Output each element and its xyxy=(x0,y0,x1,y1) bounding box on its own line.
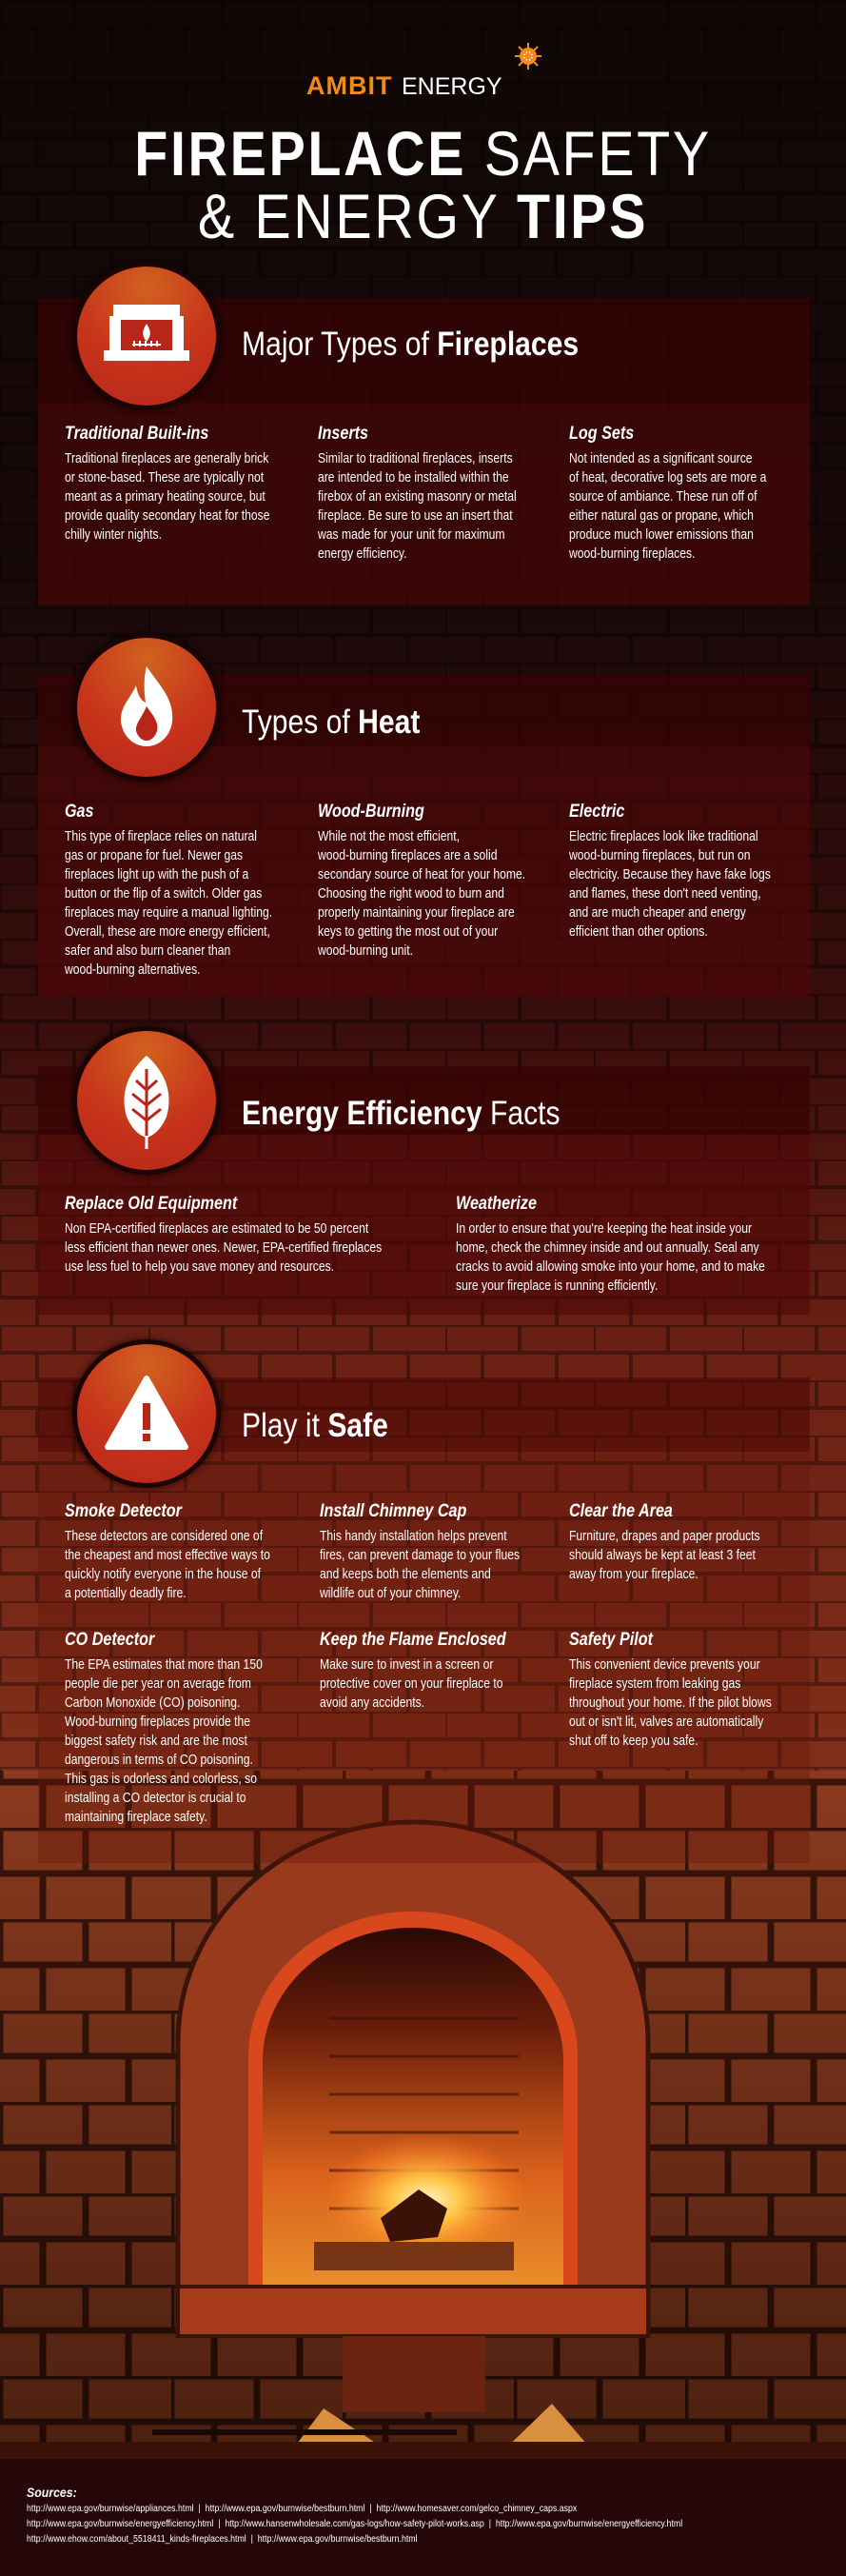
text: gas xyxy=(65,802,272,978)
text: co detector: Wood-burning fireplaces provide the xyxy=(65,1714,250,1730)
text: log sets: produce much lower emissions than xyxy=(569,527,754,543)
panel: major types of fireplaces xyxy=(38,298,810,604)
text: electric: electricity. Because they have fake logs xyxy=(569,867,771,882)
text: safety pilot: This convenient device prevents your xyxy=(569,1657,760,1673)
text: safety pilot: out or isn't lit, valves are automatically xyxy=(569,1714,763,1730)
text: clear the area: Furniture, drapes and paper products xyxy=(569,1529,760,1544)
text: safety pilot: fireplace system from leaking gas xyxy=(569,1676,740,1692)
text: wood-burning: properly maintaining your fireplace are xyxy=(318,905,515,921)
text: wood-burning: wood-burning fireplaces are a solid xyxy=(318,848,497,863)
text: log sets xyxy=(569,424,767,562)
text: replace old equipment: Non EPA-certified fireplaces are estimated to be 50 percent xyxy=(65,1221,368,1237)
text: gas: Gas xyxy=(65,802,94,822)
text: co detector: Carbon Monoxide (CO) poisoning. xyxy=(65,1695,240,1711)
text: chimney cap: wildlife out of your chimney. xyxy=(320,1586,461,1601)
panel: play it safe xyxy=(38,1377,810,1863)
text: weatherize: In order to ensure that you're keeping the heat inside your xyxy=(456,1221,752,1237)
text: co detector: This gas is odorless and colorless, so xyxy=(65,1772,257,1787)
text: log sets: wood-burning fireplaces. xyxy=(569,546,695,562)
text: traditional xyxy=(65,424,270,543)
text: wood-burning: wood-burning unit. xyxy=(318,943,413,959)
text: inserts: Similar to traditional fireplaces, inserts xyxy=(318,451,513,466)
text: electric xyxy=(569,802,771,940)
text: log sets: Not intended as a significant source xyxy=(569,451,753,466)
text: clear the area: should always be kept at least 3 feet xyxy=(569,1548,756,1563)
heading: Types of Heat xyxy=(242,703,420,741)
text: electric: Electric fireplaces look like traditional xyxy=(569,829,758,844)
logo: AMBIT xyxy=(306,71,392,100)
text: clear the area xyxy=(569,1501,760,1582)
text: inserts xyxy=(318,424,517,562)
heading: Major Types of Fireplaces xyxy=(242,326,579,363)
text: replace old equipment: Replace Old Equipment xyxy=(65,1194,237,1214)
text: traditional: provide quality secondary heat for those xyxy=(65,508,270,524)
icon: sun xyxy=(515,43,541,69)
text: gas: button or the flip of a switch. Older gas xyxy=(65,886,262,902)
icon: flame xyxy=(72,633,221,782)
sources: Sources: xyxy=(27,2485,77,2500)
text: weatherize: Weatherize xyxy=(456,1194,537,1214)
text: co detector: people die per year on average from xyxy=(65,1676,251,1692)
text: co detector xyxy=(65,1630,263,1825)
text: gas: wood-burning alternatives. xyxy=(65,962,201,978)
sources: http://www.epa.gov/burnwise/appliances.html | http://www.epa.gov/burnwise/bestburn.html | http://www.homesaver.com/gelco_chimney_caps.aspx xyxy=(27,2504,577,2514)
text: smoke detector: a potentially deadly fire. xyxy=(65,1586,187,1601)
text: safety pilot: shut off to keep you safe. xyxy=(569,1734,698,1749)
text: smoke detector: the cheapest and most effective ways to xyxy=(65,1548,270,1563)
sources: http://www.epa.gov/burnwise/energyefficiency.html | http://www.hansenwholesale.com/gas-logs/how-safety-pilot-works.asp | http://www.epa.gov/burnwise/energyefficiency.html xyxy=(27,2519,682,2529)
text: traditional: Traditional fireplaces are generally brick xyxy=(65,451,268,466)
text: log sets: Log Sets xyxy=(569,424,634,444)
text: inserts: are intended to be installed within the xyxy=(318,470,509,485)
icon: warning xyxy=(72,1339,221,1488)
text: chimney cap xyxy=(320,1501,520,1601)
text: wood-burning: Wood-Burning xyxy=(318,802,424,822)
text: co detector: CO Detector xyxy=(65,1630,154,1650)
text: smoke detector: Smoke Detector xyxy=(65,1501,182,1521)
logo xyxy=(306,43,541,100)
illustration: fireplace xyxy=(0,1771,846,2459)
text: traditional: meant as a primary heating source, but xyxy=(65,489,266,505)
text: replace old equipment: less efficient than newer ones. Newer, EPA-certified fireplaces xyxy=(65,1240,382,1256)
text: co detector: The EPA estimates that more than 150 xyxy=(65,1657,263,1673)
text: electric: and are much cheaper and energy xyxy=(569,905,746,921)
icon: leaf xyxy=(72,1026,221,1175)
sources xyxy=(0,2459,846,2576)
text: inserts: firebox of an existing masonry or metal xyxy=(318,489,517,505)
text: keep flame enclosed: protective cover on your fireplace to xyxy=(320,1676,503,1692)
text: keep flame enclosed xyxy=(320,1630,506,1711)
text: keep flame enclosed: Make sure to invest in a screen or xyxy=(320,1657,493,1673)
text: wood-burning xyxy=(318,802,525,959)
text: wood-burning: secondary source of heat for your home. xyxy=(318,867,525,882)
panel: types of heat xyxy=(38,675,810,998)
text: inserts: fireplace. Be sure to use an insert that xyxy=(318,508,513,524)
text: safety pilot xyxy=(569,1630,772,1749)
text: gas: fireplaces light up with the push of a xyxy=(65,867,248,882)
text: weatherize: home, check the chimney inside and out annually. Seal any xyxy=(456,1240,759,1256)
text: co detector: biggest safety risk and are the most xyxy=(65,1734,247,1749)
text: smoke detector: quickly notify everyone in the house of xyxy=(65,1567,261,1582)
heading: Energy Efficiency Facts xyxy=(242,1095,561,1132)
text: wood-burning: While not the most efficient, xyxy=(318,829,460,844)
text: inserts: Inserts xyxy=(318,424,368,444)
text: log sets: of heat, decorative log sets are more a xyxy=(569,470,766,485)
text: gas: Overall, these are more energy efficient, xyxy=(65,924,270,940)
text: clear the area: Clear the Area xyxy=(569,1501,673,1521)
text: co detector: maintaining fireplace safety. xyxy=(65,1810,207,1825)
text: log sets: either natural gas or propane, which xyxy=(569,508,754,524)
text: chimney cap: This handy installation helps prevent xyxy=(320,1529,507,1544)
text: chimney cap: fires, can prevent damage to your flues xyxy=(320,1548,520,1563)
text: chimney cap: and keeps both the elements and xyxy=(320,1567,491,1582)
text: wood-burning: Choosing the right wood to burn and xyxy=(318,886,504,902)
text: smoke detector: These detectors are considered one of xyxy=(65,1529,263,1544)
text: clear the area: away from your fireplace. xyxy=(569,1567,698,1582)
text: smoke detector xyxy=(65,1501,270,1601)
heading: Play it Safe xyxy=(242,1407,388,1444)
text: safety pilot: Safety Pilot xyxy=(569,1630,653,1650)
text: keep flame enclosed: avoid any accidents. xyxy=(320,1695,424,1711)
text: co detector: dangerous in terms of CO poisoning. xyxy=(65,1753,253,1768)
title xyxy=(134,118,712,251)
text: weatherize: sure your fireplace is running efficiently. xyxy=(456,1278,658,1294)
text: gas: gas or propane for fuel. Newer gas xyxy=(65,848,243,863)
text: co detector: installing a CO detector is crucial to xyxy=(65,1791,246,1806)
text: gas: safer and also burn cleaner than xyxy=(65,943,230,959)
logo: ENERGY xyxy=(402,73,502,100)
text: gas: This type of fireplace relies on natural xyxy=(65,829,257,844)
text: weatherize: cracks to avoid allowing smoke into your home, and to make xyxy=(456,1259,765,1275)
text: electric: and flames, these don't need venting, xyxy=(569,886,761,902)
text: log sets: source of ambiance. These run off of xyxy=(569,489,757,505)
text: inserts: was made for your unit for maximum xyxy=(318,527,505,543)
text: traditional: chilly winter nights. xyxy=(65,527,162,543)
text: electric: wood-burning fireplaces, but run on xyxy=(569,848,751,863)
text: electric: Electric xyxy=(569,802,624,822)
title: FIREPLACE SAFETY xyxy=(134,118,712,188)
icon: fireplace xyxy=(72,262,221,410)
text: replace old equipment: use less fuel to help you save money and resources. xyxy=(65,1259,334,1275)
text: wood-burning: keys to getting the most out of your xyxy=(318,924,498,940)
text: replace old equipment xyxy=(65,1194,382,1275)
text: traditional: Traditional Built-ins xyxy=(65,424,208,444)
text: chimney cap: Install Chimney Cap xyxy=(320,1501,466,1521)
sources: http://www.ehow.com/about_5518411_kinds-fireplaces.html | http://www.epa.gov/burnwise/bestburn.html xyxy=(27,2534,418,2545)
text: safety pilot: throughout your home. If the pilot blows xyxy=(569,1695,772,1711)
title: & ENERGY TIPS xyxy=(198,181,648,251)
text: weatherize xyxy=(456,1194,765,1294)
text: electric: efficient than other options. xyxy=(569,924,708,940)
text: inserts: energy efficiency. xyxy=(318,546,406,562)
text: keep flame enclosed: Keep the Flame Enclosed xyxy=(320,1630,506,1650)
text: gas: fireplaces may require a manual lighting. xyxy=(65,905,272,921)
text: traditional: or stone-based. These are typically not xyxy=(65,470,264,485)
panel: energy efficiency facts xyxy=(38,1066,810,1315)
